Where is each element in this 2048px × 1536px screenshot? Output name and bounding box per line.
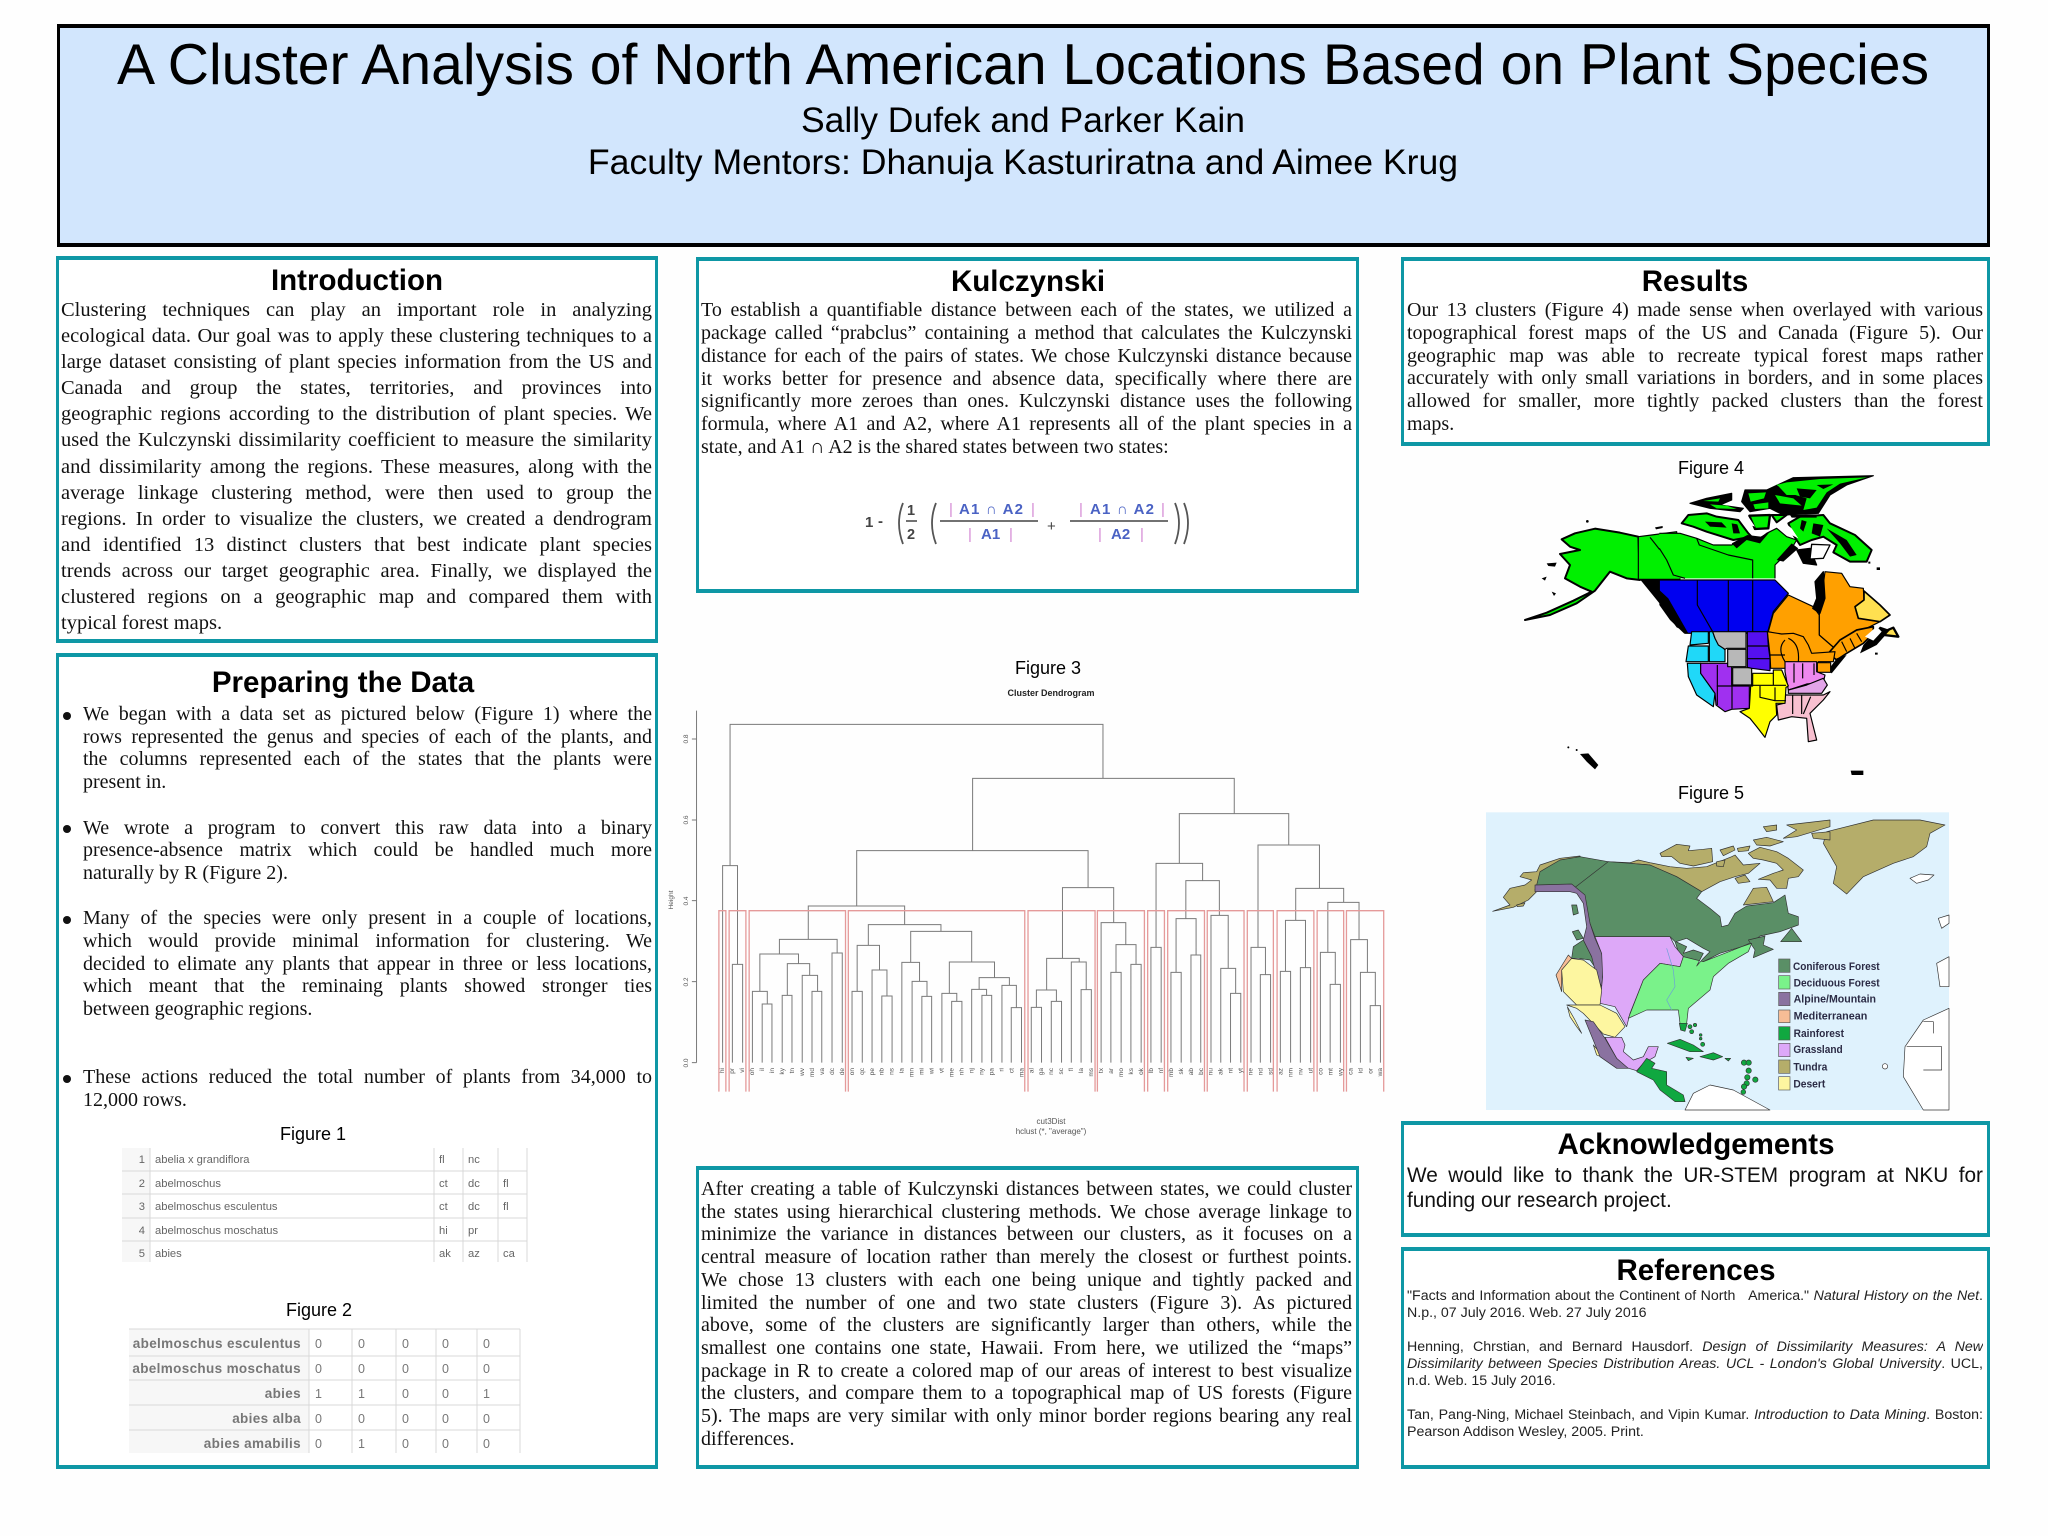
axis and leaf labels: 0.6	[683, 815, 690, 825]
chart: cluster dendrogram	[668, 688, 1384, 1136]
text: preparing the data bullets: which meant that the reminaing plants showed stronger ties	[83, 975, 652, 997]
text: introduction body: and dissimilarity among the regions. These measures, along with the	[61, 456, 652, 478]
axis and leaf labels: or	[1367, 1067, 1374, 1074]
text: kulczynski body: formula, where A1 and A2, where A1 represents all of the plant species in a	[701, 413, 1352, 435]
labrador	[1855, 591, 1890, 622]
axis and leaf labels: nc	[1048, 1067, 1055, 1075]
legend: Mediterranean	[1794, 1010, 1868, 1022]
panel: acknowledgements	[1401, 1121, 1990, 1237]
axis and leaf labels: cut3Dist	[1037, 1117, 1066, 1126]
text: introduction body: trends across our target geographic area. Finally, we displayed the	[61, 560, 652, 582]
text: clustering methods body	[701, 1178, 1352, 1450]
formula: kulczynski distance	[865, 501, 1189, 544]
text: clustering methods body: minimize the variance in distances between our clusters, as it focuses on a	[701, 1223, 1352, 1245]
text: clustering methods body: 5). The maps are very similar with only minor border regions bearing any real	[701, 1405, 1352, 1427]
formula: kulczynski distance: |	[1161, 501, 1165, 518]
text: kulczynski body: state, and A1 ∩ A2 is the shared states between two states:	[701, 436, 1169, 458]
text: preparing the data bullets: rows represented the genus and species of each of the plants, and	[83, 726, 652, 748]
axis and leaf labels: dc	[829, 1067, 836, 1075]
text: results body: accurately with only small variations in borders, and in some places	[1407, 367, 1983, 389]
axis and leaf labels: me	[948, 1068, 956, 1077]
formula: kulczynski distance: |	[1079, 501, 1083, 518]
table: figure 2 binary matrix: abies amabilis	[204, 1436, 301, 1451]
text: preparing the data bullets: the columns represented each of the states that the plants were	[83, 748, 652, 770]
label: figure 3: Figure 3	[1015, 658, 1081, 678]
text: references list: Dissimilarity between Species Distribution Areas. UCL - London's Global University. UCL,	[1407, 1356, 1983, 1372]
axis and leaf labels: mt	[1327, 1068, 1334, 1075]
map: figure 5 forest types of North America	[1486, 812, 1950, 1110]
great lakes states	[1767, 632, 1835, 668]
table: figure 2 binary matrix: 0	[402, 1437, 409, 1451]
text: acknowledgements body: We would like to thank the UR-STEM program at NKU for	[1407, 1164, 1983, 1187]
legend: Desert	[1793, 1079, 1826, 1091]
axis and leaf labels: ri	[998, 1068, 1005, 1072]
table: figure 2 binary matrix: 0	[442, 1387, 449, 1401]
text: clustering methods body: differences.	[701, 1428, 794, 1450]
axis and leaf labels: ok	[1138, 1067, 1145, 1075]
label: figure 2: Figure 2	[286, 1300, 352, 1320]
legend: Rainforest	[1794, 1028, 1844, 1040]
axis and leaf labels: sc	[1058, 1067, 1065, 1074]
text: introduction body: Clustering techniques can play an important role in analyzing	[61, 299, 652, 321]
label: figure 5: Figure 5	[1678, 783, 1744, 803]
legend: Tundra	[1793, 1062, 1828, 1074]
axis and leaf labels: pa	[988, 1068, 995, 1075]
axis and leaf labels: ne	[1248, 1068, 1255, 1075]
axis and leaf labels: co	[1317, 1068, 1324, 1075]
table: figure 2 binary matrix: 0	[483, 1337, 490, 1351]
table: figure 2 binary matrix: 1	[315, 1387, 322, 1401]
panel: clustering methods	[696, 1166, 1359, 1469]
text: results body: allowed for smaller, more tightly packed clusters than the forest	[1407, 390, 1983, 412]
table: figure 1 raw data: 1	[139, 1154, 145, 1166]
ontario and quebec	[1768, 595, 1837, 662]
axis and leaf labels: pr	[729, 1067, 736, 1074]
text: kulczynski body: distance for each of the pairs of states. We chose Kulczynski distance because	[701, 345, 1352, 367]
table: figure 2 binary matrix: abies alba	[232, 1411, 301, 1426]
authors: Sally Dufek and Parker Kain	[801, 100, 1245, 140]
africa and south america outlines	[1903, 1008, 1949, 1110]
table: figure 1 raw data: fl	[503, 1201, 509, 1213]
axis and leaf labels: fl	[1068, 1067, 1075, 1071]
table: figure 1 raw data: ca	[503, 1248, 516, 1260]
axis and leaf labels: nu	[1208, 1068, 1215, 1075]
table: figure 1 raw data: az	[468, 1248, 480, 1260]
bullet markers	[63, 712, 71, 1083]
axis and leaf labels: ma	[1018, 1068, 1025, 1077]
axis and leaf labels: vt	[938, 1068, 946, 1073]
formula: kulczynski distance: -	[878, 513, 883, 530]
heading: introduction: Introduction	[271, 264, 443, 297]
text: clustering methods body: We chose 13 clusters with each one being unique and tightly packed and	[701, 1269, 1352, 1291]
table: figure 2 binary matrix: 0	[315, 1437, 322, 1451]
legend: Coniferous Forest	[1793, 961, 1880, 973]
text: clustering methods body: limited the number of one and two state clusters (Figure 3). As pictured	[701, 1292, 1352, 1314]
table: figure 1 raw data: pr	[468, 1225, 478, 1237]
legend: Grassland	[1793, 1044, 1843, 1056]
text: introduction body: regions. In order to visualize the clusters, we created a dendrogram	[61, 508, 652, 530]
text: clustering methods body: the states using hierarchical clustering methods. We chose average linkage to	[701, 1201, 1352, 1223]
tundra mainland and islands	[1493, 820, 1830, 911]
axis and leaf labels: nv	[1298, 1067, 1304, 1075]
axis and leaf labels: 0.0	[683, 1058, 690, 1068]
baffin island	[1788, 515, 1872, 562]
axis and leaf labels: mn	[909, 1068, 916, 1077]
text: clustering methods body: After creating a table of Kulczynski distances between states, we could cluster	[701, 1178, 1352, 1200]
axis and leaf labels: ga	[1038, 1068, 1045, 1075]
text: kulczynski body: it works better for presence and absence data, specifically where there are	[701, 368, 1352, 390]
text: results body	[1407, 299, 1983, 435]
axis and leaf labels: nh	[958, 1068, 966, 1075]
grassland	[1595, 937, 1683, 1027]
heading: acknowledgements: Acknowledgements	[1557, 1128, 1835, 1161]
table: figure 1 raw data: 4	[139, 1225, 145, 1237]
table: figure 2 binary matrix: 0	[315, 1362, 322, 1376]
text: introduction body: and identified 13 distinct clusters that best indicate plant species	[61, 534, 652, 556]
label: figure 1: Figure 1	[280, 1124, 346, 1144]
text: preparing the data bullets: 12,000 rows.	[83, 1089, 187, 1111]
axis and leaf labels: pe	[869, 1068, 876, 1075]
maritimes and new england	[1828, 627, 1873, 660]
cyan northwest	[1690, 632, 1708, 645]
axis and leaf labels: il	[759, 1067, 766, 1071]
text: kulczynski body: To establish a quantifiable distance between each of the states, we utilized a	[701, 299, 1352, 321]
table: figure 2 binary matrix: 0	[483, 1412, 490, 1426]
table: figure 2 binary matrix: 0	[402, 1362, 409, 1376]
text: introduction body: large dataset consisting of plant species information from the US and	[61, 351, 652, 373]
table: figure 2 binary matrix: 0	[315, 1412, 322, 1426]
axis and leaf labels: wa	[1377, 1068, 1384, 1077]
text: kulczynski body: significantly more zeroes than ones. Kulczynski distance uses the following	[701, 390, 1352, 412]
table: figure 2 binary matrix: 0	[358, 1412, 365, 1426]
text: references list: N.p., 07 July 2016. Web. 27 July 2016	[1407, 1305, 1646, 1321]
text: references list: Henning, Chrstian, and Bernard Hausdorf. Design of Dissimilarity Measures: A New	[1407, 1339, 1983, 1355]
axis and leaf labels: de	[839, 1068, 846, 1075]
text: results body: geographic map was able to recreate typical forest maps rather	[1407, 345, 1983, 367]
hawaii and puerto rico	[1542, 520, 1880, 775]
legend: Alpine/Mountain	[1794, 993, 1876, 1005]
desert california	[1562, 958, 1602, 1005]
axis and leaf labels: on	[849, 1068, 856, 1075]
formula: kulczynski distance: A1 ∩ A2	[959, 501, 1023, 518]
table: figure 1 raw data: ak	[439, 1248, 451, 1260]
axis and leaf labels: hi	[719, 1068, 726, 1073]
axis and leaf labels: nj	[968, 1068, 976, 1073]
indigo plains	[1747, 632, 1770, 671]
text: introduction body	[61, 299, 652, 634]
alpine mountain	[1535, 884, 1603, 987]
text: acknowledgements body	[1407, 1164, 1983, 1212]
chart title: Cluster Dendrogram	[1007, 688, 1095, 698]
table: figure 2 binary matrix: 0	[358, 1362, 365, 1376]
text: introduction body: average linkage clustering method, were then used to group the	[61, 482, 652, 504]
table: figure 1 raw data: fl	[439, 1154, 445, 1166]
axis and leaf labels: mo	[1118, 1068, 1125, 1077]
table: figure 2 binary matrix: abies	[265, 1386, 301, 1401]
table: figure 2 binary matrix: 0	[402, 1412, 409, 1426]
text: clustering methods body: package in R to create a colored map of our areas of interest to best visualize	[701, 1360, 1352, 1382]
axis and leaf labels: ns	[889, 1067, 896, 1075]
newfoundland	[1880, 628, 1898, 637]
table: figure 2 binary matrix	[129, 1328, 520, 1453]
axis and leaf labels: ar	[1108, 1067, 1115, 1074]
text: introduction body: Canada and group the states, territories, and provinces into	[61, 377, 652, 399]
formula: kulczynski distance: A1	[981, 526, 1000, 543]
axis and leaf labels: la	[1078, 1068, 1085, 1073]
axis and leaf labels: tn	[789, 1068, 796, 1073]
mediterranean	[1556, 955, 1572, 992]
faculty mentors: Faculty Mentors: Dhanuja Kasturiratna and Aimee Krug	[588, 142, 1458, 182]
yukon	[1638, 532, 1680, 579]
axis and leaf labels: ks	[1128, 1067, 1135, 1074]
axis and leaf labels: wi	[929, 1068, 936, 1075]
upper south	[1788, 678, 1827, 693]
formula: kulczynski distance: |	[1009, 526, 1013, 543]
table: figure 2 binary matrix: 1	[358, 1437, 365, 1451]
table: figure 1 raw data: abies	[155, 1248, 182, 1260]
panel: kulczynski	[696, 257, 1359, 593]
text: results body: maps.	[1407, 413, 1454, 435]
axis and leaf labels: ky	[779, 1067, 786, 1074]
axis and leaf labels: nd	[1258, 1068, 1265, 1075]
table: figure 2 binary matrix: 0	[315, 1337, 322, 1351]
text: preparing the data bullets: We wrote a program to convert this raw data into a binary	[83, 816, 652, 838]
table: figure 1 raw data: dc	[468, 1201, 480, 1213]
axis and leaf labels: al	[1028, 1067, 1035, 1073]
alpine and grassland mexico	[1585, 1020, 1658, 1071]
table: figure 2 binary matrix: 0	[442, 1362, 449, 1376]
text: preparing the data bullets: between geographic regions.	[83, 998, 312, 1020]
greenland	[1823, 820, 1945, 894]
table: figure 2 binary matrix: 0	[442, 1412, 449, 1426]
desert mexico	[1567, 1005, 1625, 1058]
text: references list: Pearson Addison Wesley, 2005. Print.	[1407, 1424, 1644, 1440]
purple southwest	[1701, 663, 1749, 712]
axis and leaf labels: vi	[739, 1068, 746, 1073]
table: figure 2 binary matrix: 0	[483, 1362, 490, 1376]
table: figure 1 raw data	[122, 1148, 528, 1262]
axis and leaf labels: Height	[668, 890, 675, 909]
axis and leaf labels: ms	[1088, 1067, 1095, 1077]
great lakes	[1676, 938, 1710, 966]
axis and leaf labels: yt	[1238, 1068, 1245, 1073]
axis and leaf labels: ny	[978, 1067, 985, 1075]
table: figure 2 binary matrix: 1	[483, 1387, 490, 1401]
text: kulczynski body: package called “prabclus” containing a method that calculates the Kulczynski	[701, 322, 1352, 344]
title banner	[57, 24, 1990, 247]
text: kulczynski body	[701, 299, 1352, 458]
text: introduction body: ecological data. Our goal was to apply these clustering techniques to a	[61, 325, 652, 347]
table: figure 2 binary matrix: abelmoschus esculentus	[133, 1336, 301, 1351]
axis and leaf labels: tx	[1098, 1067, 1105, 1073]
axis and leaf labels: nf	[1158, 1068, 1165, 1073]
arctic archipelago	[1742, 476, 1873, 515]
text: clustering methods body: the clusters, and compare them to a topographical map of US forests (Figure	[701, 1382, 1352, 1404]
table: figure 1 raw data: abelmoschus esculentus	[155, 1201, 278, 1213]
formula: kulczynski distance: |	[1031, 501, 1035, 518]
table: figure 1 raw data: 3	[139, 1201, 145, 1213]
legend	[1779, 959, 1880, 1091]
text: introduction body: typical forest maps.	[61, 612, 222, 634]
panel: references	[1401, 1247, 1990, 1469]
axis and leaf labels: 0.4	[683, 896, 690, 906]
panel: results	[1401, 257, 1990, 446]
iceland	[1910, 874, 1934, 883]
axis and leaf labels: ct	[1008, 1068, 1015, 1073]
text: preparing the data bullets	[83, 703, 652, 1111]
table: figure 2 binary matrix: abelmoschus moschatus	[132, 1361, 301, 1376]
northern canada mainland	[1677, 528, 1797, 578]
formula: kulczynski distance: |	[968, 526, 972, 543]
california	[1687, 663, 1715, 707]
table: figure 1 raw data: abelmoschus moschatus	[155, 1225, 279, 1237]
text: clustering methods body: above, some of the clusters are significantly larger than others, while the	[701, 1314, 1352, 1336]
formula: kulczynski distance: A1 ∩ A2	[1090, 501, 1154, 518]
text: references list	[1407, 1288, 1983, 1440]
gray states	[1713, 632, 1746, 649]
axis and leaf labels: in	[769, 1068, 776, 1073]
axis and leaf labels: mb	[1168, 1068, 1175, 1077]
text: preparing the data bullets: These actions reduced the total number of plants from 34,000 to	[83, 1066, 652, 1088]
axis and leaf labels: ia	[899, 1068, 906, 1073]
text: clustering methods body: central measure of location rather than merely the closest or furthest points.	[701, 1246, 1352, 1268]
text: references list: "Facts and Information about the Continent of North America." Natural History on the Net.	[1407, 1288, 1983, 1304]
axis and leaf labels: az	[1278, 1068, 1284, 1075]
rainforest	[1637, 1023, 1758, 1102]
axis and leaf labels: 0.8	[683, 734, 690, 744]
western canada	[1659, 580, 1788, 633]
table: figure 1 raw data: abelmoschus	[155, 1178, 221, 1190]
table: figure 2 binary matrix: 0	[442, 1337, 449, 1351]
table: figure 1 raw data: nc	[468, 1154, 480, 1166]
panel: preparing the data	[56, 653, 658, 1469]
axis and leaf labels: va	[819, 1068, 826, 1075]
heading: references: References	[1616, 1254, 1776, 1287]
axis and leaf labels: md	[809, 1068, 816, 1077]
formula: kulczynski distance: |	[949, 501, 953, 518]
table: figure 2 binary matrix: 0	[402, 1337, 409, 1351]
table: figure 1 raw data: dc	[468, 1178, 480, 1190]
formula: kulczynski distance: |	[1140, 526, 1144, 543]
axis and leaf labels: sk	[1178, 1067, 1185, 1074]
text: results body: topographical forest maps of the US and Canada (Figure 5). Our	[1407, 322, 1983, 344]
axis and leaf labels	[668, 734, 1384, 1136]
formula: kulczynski distance: 2	[907, 527, 915, 543]
axis and leaf labels: lb	[1148, 1068, 1155, 1073]
deciduous forest	[1628, 943, 1752, 1023]
text: references list: n.d. Web. 15 July 2016.	[1407, 1373, 1556, 1389]
axis and leaf labels: oh	[749, 1068, 756, 1075]
formula: kulczynski distance: 1	[865, 514, 873, 531]
text: clustering methods body: smallest one contains one state, Hawaii. From here, we utilized the “maps”	[701, 1337, 1352, 1359]
axis and leaf labels: 0.2	[683, 977, 690, 987]
table: figure 1 raw data: ct	[439, 1178, 449, 1190]
table: figure 1 raw data: 2	[139, 1178, 145, 1190]
text: preparing the data bullets: present in.	[83, 771, 166, 793]
axis and leaf labels: nb	[879, 1068, 886, 1075]
magenta states	[1785, 662, 1825, 690]
table: figure 2 binary matrix: 1	[358, 1387, 365, 1401]
text: introduction body: clustered regions on a geographic map and compared them with	[61, 586, 652, 608]
dendrogram tree and cluster rectangles	[692, 710, 1384, 1092]
coniferous forest	[1535, 857, 1802, 970]
axis and leaf labels: ca	[1347, 1068, 1354, 1075]
axis and leaf labels: mi	[919, 1068, 926, 1075]
axis and leaf labels: qc	[859, 1067, 866, 1075]
formula: kulczynski distance: |	[1098, 526, 1102, 543]
table: figure 2 binary matrix: 0	[442, 1437, 449, 1451]
axis and leaf labels: wv	[799, 1067, 806, 1077]
text: introduction body: used the Kulczynski dissimilarity coefficient to measure the similarity	[61, 429, 652, 451]
british columbia coast	[1640, 579, 1688, 633]
text: results body: Our 13 clusters (Figure 4) made sense when overlayed with various	[1407, 299, 1983, 321]
heading: results: Results	[1642, 265, 1748, 298]
text: preparing the data bullets: We began with a data set as pictured below (Figure 1) where the	[83, 703, 652, 725]
formula: kulczynski distance: +	[1047, 518, 1056, 535]
alaska	[1525, 529, 1640, 620]
label: figure 4: Figure 4	[1678, 458, 1744, 478]
legend: Deciduous Forest	[1794, 977, 1880, 989]
axis and leaf labels: ab	[1188, 1068, 1195, 1075]
axis and leaf labels: sd	[1268, 1068, 1275, 1075]
pennsylvania	[1817, 663, 1831, 672]
axis and leaf labels: nm	[1288, 1068, 1294, 1077]
text: acknowledgements body: funding our research project.	[1407, 1189, 1672, 1212]
table: figure 1 raw data: abelia x grandiflora	[155, 1154, 250, 1166]
title: A Cluster Analysis of North American Locations Based on Plant Species	[117, 33, 1929, 97]
yellow south central	[1740, 670, 1788, 737]
table: figure 2 binary matrix: 0	[483, 1437, 490, 1451]
heading: preparing the data: Preparing the Data	[212, 666, 474, 699]
table: figure 1 raw data: 5	[139, 1248, 145, 1260]
axis and leaf labels: hclust (*, "average")	[1016, 1127, 1087, 1136]
table: figure 1 raw data: hi	[439, 1225, 448, 1237]
axis and leaf labels: nt	[1228, 1068, 1235, 1073]
table: figure 1 raw data: fl	[503, 1178, 509, 1190]
table: figure 1 raw data: ct	[439, 1201, 449, 1213]
table: figure 2 binary matrix: 0	[402, 1387, 409, 1401]
panel: introduction	[56, 256, 658, 643]
axis and leaf labels: wy	[1337, 1067, 1344, 1077]
text: preparing the data bullets: Many of the species were only present in a couple of locations,	[83, 907, 652, 929]
axis and leaf labels: ak	[1218, 1067, 1225, 1075]
text: introduction body: geographic regions according to the distribution of plant species. We	[61, 403, 652, 425]
heading: kulczynski: Kulczynski	[951, 265, 1105, 298]
southeast	[1777, 692, 1830, 742]
table: figure 2 binary matrix: 0	[358, 1337, 365, 1351]
formula: kulczynski distance: A2	[1111, 526, 1130, 543]
axis and leaf labels: ut	[1307, 1068, 1314, 1073]
map: figure 4 cluster map of North America	[1524, 475, 1900, 775]
text: preparing the data bullets: presence-absence matrix which could be handled much more	[83, 839, 652, 861]
text: preparing the data bullets: which would provide minimal information for clustering. We	[83, 930, 652, 952]
foxe basin and southampton	[1797, 548, 1817, 565]
text: preparing the data bullets: decided to elimate any plants that appear in three or less locations,	[83, 953, 652, 975]
text: references list: Tan, Pang-Ning, Michael Steinbach, and Vipin Kumar. Introduction to Data Mining. Boston:	[1407, 1407, 1983, 1423]
formula: kulczynski distance: 1	[907, 503, 915, 519]
axis and leaf labels: bc	[1198, 1067, 1205, 1075]
axis and leaf labels: id	[1357, 1068, 1364, 1073]
text: preparing the data bullets: naturally by R (Figure 2).	[83, 862, 288, 884]
